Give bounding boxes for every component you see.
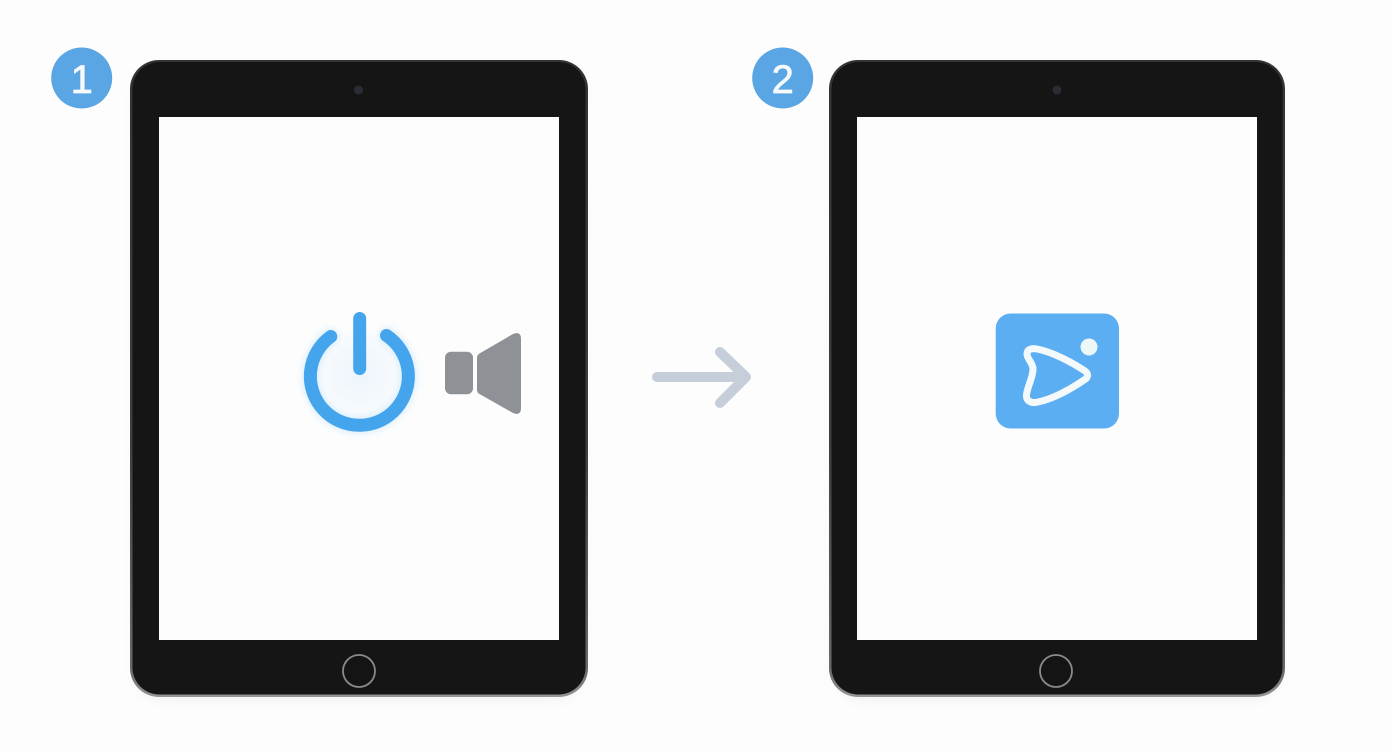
tablet 1 screen bbox=[159, 117, 559, 640]
app dot bbox=[1080, 338, 1098, 356]
tablet 2 bbox=[829, 60, 1285, 700]
step badge 1: 1 bbox=[71, 58, 93, 102]
tablet 1 home button bbox=[343, 655, 375, 687]
step badge 1 bbox=[51, 48, 112, 108]
tablet 2 screen bbox=[857, 117, 1257, 640]
tablet 2 home button bbox=[1040, 655, 1072, 687]
app play glyph bbox=[1026, 349, 1088, 403]
arrow bbox=[657, 352, 746, 403]
tablet 1 bbox=[130, 60, 588, 700]
icon: volume button bbox=[445, 333, 521, 414]
icon: power button bbox=[310, 318, 408, 425]
step badge 2 bbox=[752, 48, 813, 108]
step badge 2: 2 bbox=[772, 58, 794, 102]
icon: app bbox=[996, 314, 1119, 428]
tablet 2 camera bbox=[1052, 86, 1062, 94]
tablet 1 camera bbox=[354, 86, 363, 94]
